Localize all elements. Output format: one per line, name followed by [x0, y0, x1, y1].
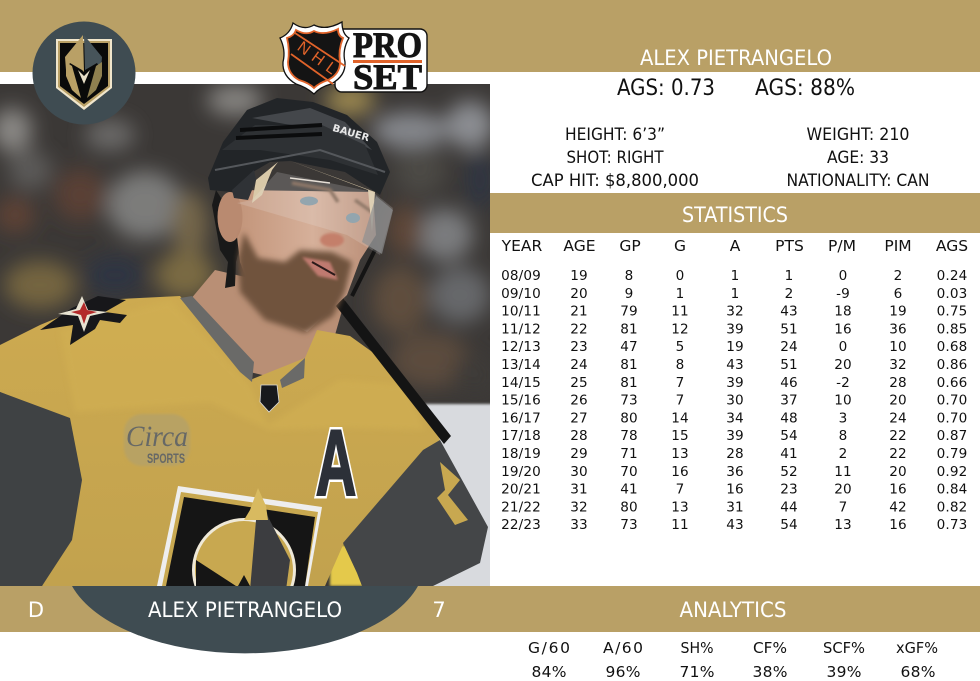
table rows: 28: [726, 446, 744, 462]
table rows: 13: [671, 499, 689, 515]
table rows: 8: [625, 268, 633, 284]
table header: G: [674, 237, 686, 255]
table rows: 30: [726, 393, 744, 409]
table rows: 0.73: [937, 517, 967, 533]
table header: AGE: [563, 237, 596, 255]
table rows: 80: [620, 499, 638, 515]
statistics band: STATISTICS: [682, 203, 788, 228]
blurred crowd background: [0, 84, 497, 397]
table rows: 39: [726, 428, 744, 444]
table rows: 23: [780, 482, 798, 498]
table rows: 6: [894, 286, 902, 302]
table rows: -2: [836, 375, 850, 391]
table rows: 0.82: [937, 499, 967, 515]
table rows: 19: [889, 304, 907, 320]
table rows: 10: [889, 339, 907, 355]
nose: [320, 233, 344, 247]
table rows: 0.68: [937, 339, 967, 355]
NHL shield: [280, 22, 349, 94]
table rows: 0.87: [937, 428, 967, 444]
jersey collar: [180, 296, 305, 388]
table rows: 0.03: [937, 286, 967, 302]
neck: [190, 270, 345, 378]
player bio right: WEIGHT: 210: [806, 125, 910, 145]
table rows: 19/20: [501, 464, 541, 480]
table rows: 20: [834, 482, 852, 498]
table rows: 73: [620, 393, 638, 409]
table rows: 12/13: [501, 339, 541, 355]
table rows: 39: [726, 321, 744, 337]
table rows: 13/14: [501, 357, 541, 373]
table rows: 31: [570, 482, 588, 498]
table rows: 5: [676, 339, 684, 355]
player bio right: NATIONALITY: CAN: [786, 171, 930, 191]
mouth: [302, 257, 338, 280]
analytics values: 84%: [532, 663, 566, 681]
sponsor patch: Circa Sports: Circa: [126, 420, 188, 453]
table rows: 17/18: [501, 428, 541, 444]
table rows: 16: [726, 482, 744, 498]
table rows: 1: [676, 286, 684, 302]
table rows: 29: [570, 446, 588, 462]
table rows: 18: [834, 304, 852, 320]
table header: AGS: [936, 237, 968, 255]
table rows: 26: [570, 393, 588, 409]
header player name: ALEX PIETRANGELO: [640, 46, 832, 70]
table rows: 1: [731, 286, 739, 302]
jersey chest crest: [157, 486, 322, 586]
table rows: 24: [570, 357, 588, 373]
table rows: 8: [676, 357, 684, 373]
AGS percentile: AGS: 88%: [755, 76, 855, 101]
analytics labels: [528, 639, 938, 657]
table rows: 14: [671, 410, 689, 426]
table rows: 70: [620, 464, 638, 480]
table rows: 20: [834, 357, 852, 373]
analytics labels: CF%: [753, 639, 787, 657]
table header: YEAR: [501, 237, 543, 255]
table rows: 0.84: [937, 482, 967, 498]
table rows: 0: [839, 339, 847, 355]
table rows: 19: [726, 339, 744, 355]
table rows: 18/19: [501, 446, 541, 462]
table rows: 48: [780, 410, 798, 426]
shoulder star patch: [40, 296, 127, 345]
analytics values: [532, 663, 936, 681]
table rows: 16/17: [501, 410, 541, 426]
analytics band: ANALYTICS: [680, 598, 786, 623]
table rows: 28: [570, 428, 588, 444]
table rows: 0.75: [937, 304, 967, 320]
table header: A: [730, 237, 741, 255]
table rows: 52: [780, 464, 798, 480]
table rows: 2: [839, 446, 847, 462]
table rows: 32: [889, 357, 907, 373]
rink boards and ice: [0, 404, 495, 594]
player name bar: [0, 586, 490, 653]
table rows: 28: [889, 375, 907, 391]
table rows: 34: [726, 410, 744, 426]
table rows: -9: [836, 286, 850, 302]
beard: [238, 232, 352, 333]
jersey body: [0, 296, 488, 586]
table rows: 43: [780, 304, 798, 320]
analytics values: 39%: [826, 663, 862, 681]
table rows: 42: [889, 499, 907, 515]
head and face: [218, 183, 376, 333]
table rows: 23: [570, 339, 588, 355]
player bio right: [786, 125, 930, 191]
analytics values: 68%: [900, 663, 936, 681]
table rows: 0.70: [937, 393, 967, 409]
NHL neck crest: [260, 385, 279, 412]
table rows: 20: [889, 393, 907, 409]
statistics band: [490, 193, 980, 233]
table rows: 08/09: [501, 268, 541, 284]
table rows: 73: [620, 517, 638, 533]
table rows: 0.86: [937, 357, 967, 373]
table rows: 78: [620, 428, 638, 444]
analytics labels: SCF%: [823, 639, 865, 657]
table rows: 14/15: [501, 375, 541, 391]
table rows: [501, 268, 967, 533]
table rows: 39: [726, 375, 744, 391]
table rows: 79: [620, 304, 638, 320]
helmet: [208, 98, 393, 255]
table rows: 7: [676, 393, 684, 409]
analytics labels: G/60: [528, 639, 570, 657]
table rows: 12: [671, 321, 689, 337]
table rows: 16: [834, 321, 852, 337]
table rows: 24: [889, 410, 907, 426]
player bio left: HEIGHT: 6’3”: [565, 125, 665, 145]
table rows: 11/12: [501, 321, 541, 337]
table rows: 43: [726, 517, 744, 533]
table rows: 81: [620, 375, 638, 391]
table rows: 22: [889, 428, 907, 444]
table rows: 27: [570, 410, 588, 426]
table header: [501, 237, 968, 255]
analytics labels: A/60: [603, 639, 643, 657]
table rows: 54: [780, 517, 798, 533]
table rows: 0.70: [937, 410, 967, 426]
table rows: 20: [570, 286, 588, 302]
table rows: 1: [731, 268, 739, 284]
table rows: 32: [570, 499, 588, 515]
table rows: 7: [839, 499, 847, 515]
table rows: 10/11: [501, 304, 541, 320]
table rows: 0.85: [937, 321, 967, 337]
sponsor patch: Circa Sports: [124, 414, 190, 466]
table rows: 21: [570, 304, 588, 320]
table rows: 22: [889, 446, 907, 462]
table rows: 0.66: [937, 375, 967, 391]
table rows: 33: [570, 517, 588, 533]
table rows: 9: [625, 286, 633, 302]
AGS score: AGS: 0.73: [617, 76, 715, 101]
PRO wordmark: PRO: [353, 25, 422, 65]
table rows: 16: [889, 482, 907, 498]
visor: [237, 172, 393, 255]
table rows: 13: [834, 517, 852, 533]
table rows: 30: [570, 464, 588, 480]
table rows: 10: [834, 393, 852, 409]
table rows: 46: [780, 375, 798, 391]
analytics values: 71%: [680, 663, 714, 681]
table rows: 41: [780, 446, 798, 462]
table rows: 44: [780, 499, 798, 515]
player photo: [0, 84, 497, 622]
jersey sleeves: [0, 392, 82, 586]
player bio left: SHOT: RIGHT: [566, 148, 664, 168]
table rows: 0.24: [937, 268, 967, 284]
table rows: 51: [780, 321, 798, 337]
eyes and brows: [300, 196, 318, 206]
table rows: 36: [726, 464, 744, 480]
table rows: 0: [676, 268, 684, 284]
helmet: BAUER: [331, 123, 371, 144]
helmet straps: [212, 190, 451, 444]
player name: ALEX PIETRANGELO: [148, 598, 342, 622]
captain letter A: A: [316, 411, 356, 516]
table rows: 09/10: [501, 286, 541, 302]
player bio left: [531, 125, 699, 191]
table rows: 36: [889, 321, 907, 337]
analytics labels: xGF%: [896, 639, 938, 657]
table rows: 1: [785, 268, 793, 284]
analytics labels: SH%: [680, 639, 714, 657]
table rows: 0: [839, 268, 847, 284]
table rows: 16: [671, 464, 689, 480]
table rows: 19: [570, 268, 588, 284]
table rows: 20: [889, 464, 907, 480]
table header: GP: [619, 237, 641, 255]
captain letter A: A: [316, 411, 356, 516]
table rows: 32: [726, 304, 744, 320]
table rows: 24: [780, 339, 798, 355]
table rows: 54: [780, 428, 798, 444]
player bio left: CAP HIT: $8,800,000: [531, 171, 699, 191]
NHL Pro Set logo: [280, 22, 427, 97]
analytics values: 96%: [606, 663, 640, 681]
table rows: 11: [834, 464, 852, 480]
analytics values: 38%: [752, 663, 788, 681]
statistics table: [501, 237, 968, 533]
jersey number: 7: [432, 598, 446, 622]
table rows: 22/23: [501, 517, 541, 533]
table rows: 13: [671, 446, 689, 462]
table rows: 43: [726, 357, 744, 373]
NHL shield: NHL: [294, 39, 340, 78]
top gold band: [0, 0, 980, 72]
table rows: 8: [839, 428, 847, 444]
table rows: 0.92: [937, 464, 967, 480]
table rows: 47: [620, 339, 638, 355]
player bio right: AGE: 33: [827, 148, 889, 168]
table rows: 41: [620, 482, 638, 498]
analytics band: [490, 586, 980, 632]
sponsor patch: Circa Sports: SPORTS: [147, 450, 185, 466]
nameplate arc: [72, 586, 418, 653]
SET wordmark: SET: [353, 57, 422, 97]
table rows: 20/21: [501, 482, 541, 498]
table rows: 16: [889, 517, 907, 533]
captain letter A: [314, 427, 358, 498]
table rows: 11: [671, 517, 689, 533]
table rows: 7: [676, 482, 684, 498]
table header: P/M: [828, 237, 856, 255]
table rows: 31: [726, 499, 744, 515]
table rows: 2: [785, 286, 793, 302]
table rows: 71: [620, 446, 638, 462]
table rows: 22: [570, 321, 588, 337]
table rows: 7: [676, 375, 684, 391]
table rows: 0.79: [937, 446, 967, 462]
table rows: 15/16: [501, 393, 541, 409]
table header: PIM: [884, 237, 912, 255]
table header: PTS: [775, 237, 804, 255]
table rows: 81: [620, 321, 638, 337]
table rows: 11: [671, 304, 689, 320]
table rows: 37: [780, 393, 798, 409]
team logo badge: [32, 22, 136, 124]
position: D: [28, 598, 44, 622]
table rows: 51: [780, 357, 798, 373]
table rows: 3: [839, 410, 847, 426]
table rows: 2: [894, 268, 902, 284]
table rows: 80: [620, 410, 638, 426]
table rows: 21/22: [501, 499, 541, 515]
table rows: 25: [570, 375, 588, 391]
table rows: 81: [620, 357, 638, 373]
table rows: 15: [671, 428, 689, 444]
